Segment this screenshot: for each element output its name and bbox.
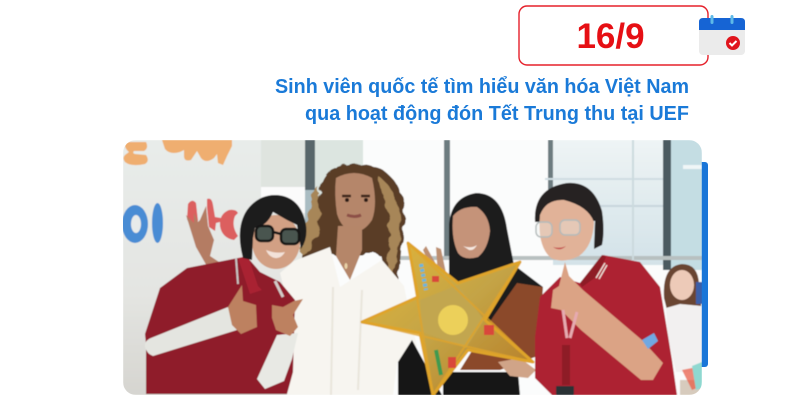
hijab student — [398, 193, 543, 395]
title — [275, 75, 689, 125]
date text: 16/9 — [576, 17, 645, 56]
photo background — [123, 140, 702, 395]
raised hand behind — [186, 206, 219, 265]
student in white shirt — [280, 164, 417, 395]
title: Sinh viên quốc tế tìm hiểu văn hóa Việt Nam — [275, 75, 689, 98]
date box — [519, 6, 708, 65]
icon: calendar — [699, 15, 745, 55]
accent bar — [698, 162, 708, 367]
wall lettering — [122, 140, 238, 243]
title: qua hoạt động đón Tết Trung thu tại UEF — [305, 102, 689, 125]
right student in red polo — [535, 183, 677, 395]
star lantern — [362, 243, 533, 395]
curly hair — [303, 164, 405, 288]
background student right — [664, 264, 702, 395]
photo: students holding a star lantern — [122, 140, 702, 395]
left student in red polo — [145, 195, 306, 394]
